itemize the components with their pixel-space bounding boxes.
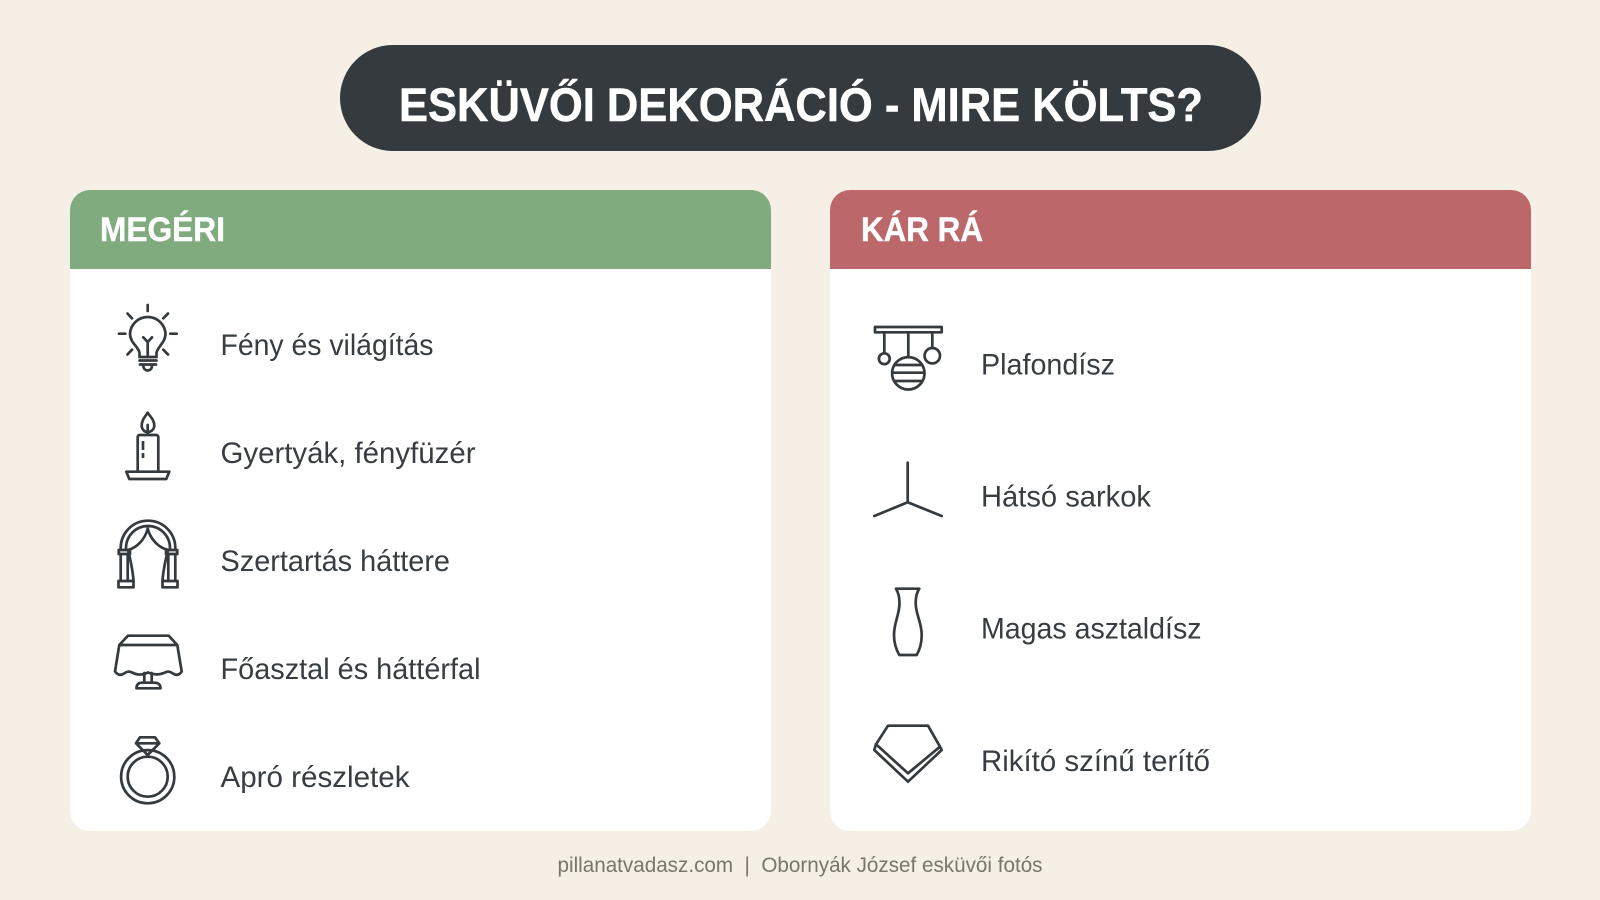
panel heading: megéri: MEGÉRI — [100, 211, 225, 249]
icon: table — [115, 636, 182, 688]
icon: ring — [121, 737, 174, 803]
item text: apró részletek: Apró részletek — [220, 761, 410, 794]
icon: ceiling ornament — [875, 327, 942, 389]
panel: megéri — [70, 190, 771, 831]
item text: szertartás háttere: Szertartás háttere — [220, 545, 450, 578]
icon: light bulb — [119, 305, 177, 370]
panel: kár rá — [830, 190, 1531, 831]
icon: candle — [126, 413, 169, 479]
item text: rikító színű terítő: Rikító színű terítő — [981, 745, 1210, 778]
icon: folded napkin — [874, 726, 942, 782]
panel heading: megéri — [70, 190, 771, 269]
title — [340, 45, 1261, 151]
item text: fény és világítás: Fény és világítás — [220, 329, 434, 362]
title: ESKÜVŐI DEKORÁCIÓ - MIRE KÖLTS? — [399, 78, 1203, 131]
item text: gyertyák, fényfüzér: Gyertyák, fényfüzér — [220, 437, 476, 470]
icon: room corner — [874, 463, 942, 516]
panel heading: kár rá — [830, 190, 1531, 269]
footer: pillanatvadasz.com | Obornyák József esküvői fotós — [558, 853, 1042, 877]
item text: magas asztaldísz: Magas asztaldísz — [981, 612, 1202, 646]
item text: plafondísz: Plafondísz — [981, 348, 1115, 382]
icon: ceremony arch — [118, 521, 178, 587]
item text: főasztal és háttérfal: Főasztal és háttérfal — [220, 653, 480, 686]
item text: hátsó sarkok: Hátsó sarkok — [981, 480, 1152, 514]
panel heading: kár rá: KÁR RÁ — [861, 211, 983, 249]
icon: tall vase — [894, 589, 922, 655]
